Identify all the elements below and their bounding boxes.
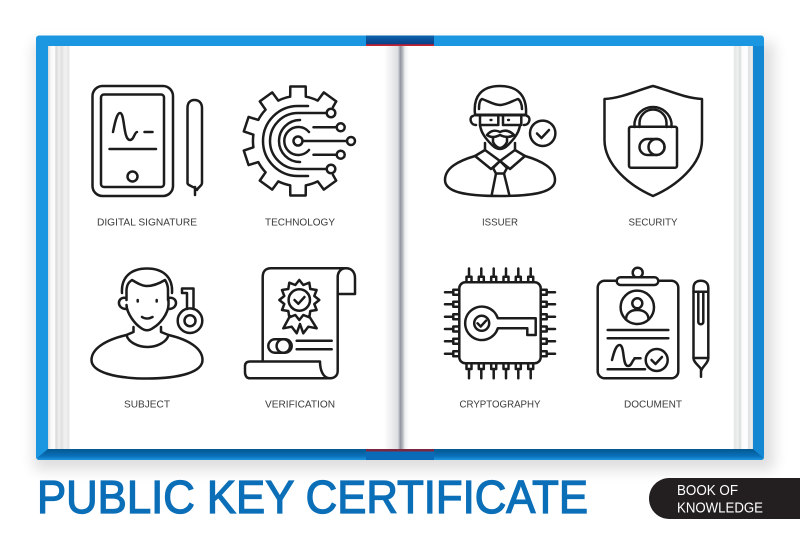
label: digital signature: DIGITAL SIGNATURE — [97, 218, 197, 228]
book — [34, 36, 774, 470]
icon: subject — [92, 268, 202, 378]
icon: cryptography chip and key — [445, 268, 555, 378]
label: document: DOCUMENT — [624, 400, 683, 410]
icon: digital signature — [92, 86, 202, 196]
badge: book of knowledge — [649, 478, 800, 519]
right page stack — [733, 46, 753, 449]
book cover — [36, 36, 764, 460]
icon: verification certificate — [245, 268, 355, 378]
bottom ribbon — [366, 449, 434, 460]
icon: security shield — [604, 86, 702, 196]
label: subject: SUBJECT — [124, 400, 171, 410]
icon: issuer — [445, 86, 555, 196]
bottom cover edge — [37, 449, 764, 460]
left page stack — [48, 46, 70, 449]
icon: technology gear — [244, 86, 355, 196]
label: technology: TECHNOLOGY — [265, 218, 335, 228]
title: PUBLIC KEY CERTIFICATE — [37, 471, 588, 523]
icon: document clipboard and pen — [598, 268, 708, 378]
badge: book of knowledge: KNOWLEDGE — [677, 500, 763, 516]
label: cryptography: CRYPTOGRAPHY — [460, 400, 541, 410]
badge: book of knowledge: BOOK OF — [677, 483, 738, 499]
label: security: SECURITY — [628, 218, 678, 228]
label: issuer: ISSUER — [482, 218, 518, 228]
pages — [70, 46, 733, 449]
label: verification: VERIFICATION — [265, 400, 335, 410]
right cover edge — [753, 46, 764, 457]
book spine — [384, 46, 409, 449]
top ribbon — [366, 36, 434, 46]
